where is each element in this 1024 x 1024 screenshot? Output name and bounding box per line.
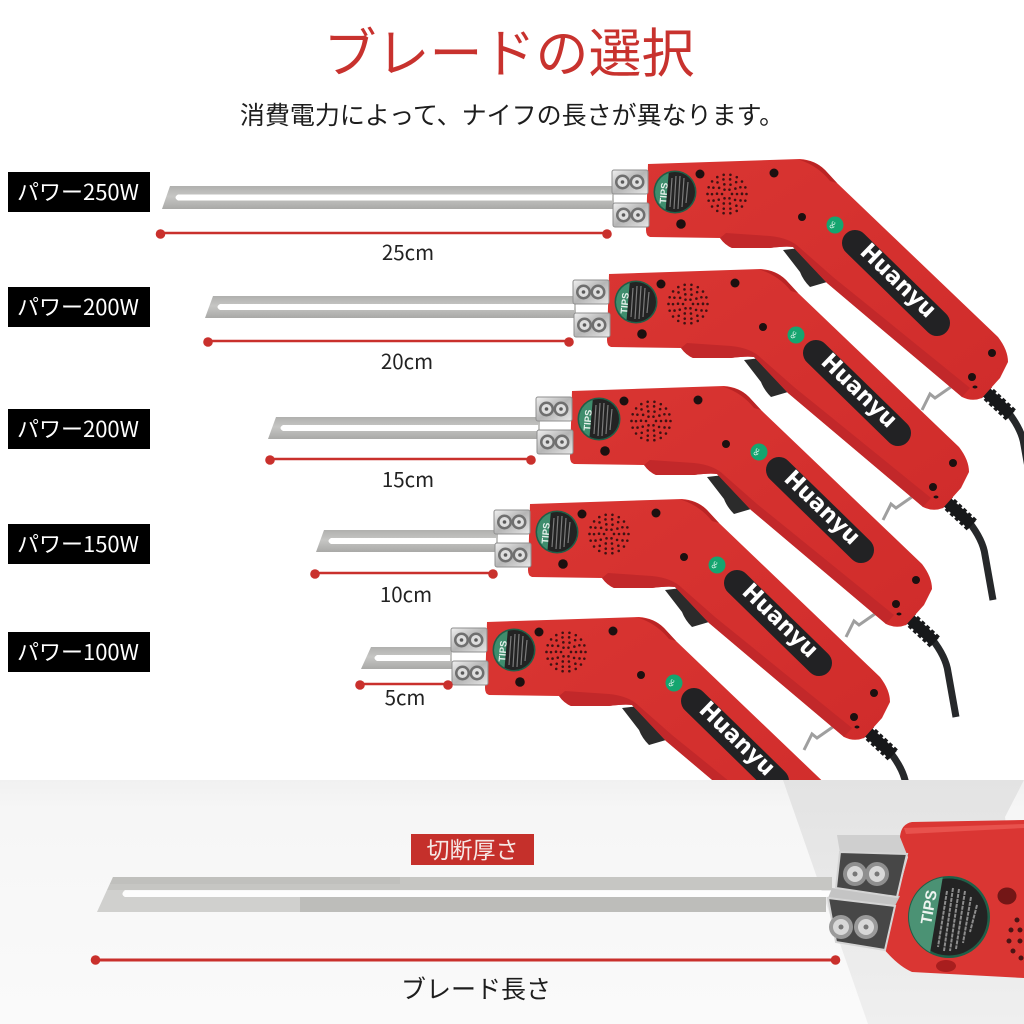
tool group: 10cm [316, 499, 914, 830]
length line 25cm [156, 229, 612, 239]
knife 15cm: TIPS [582, 409, 595, 431]
large blade [97, 877, 832, 912]
length label 20cm: 20cm [381, 345, 433, 375]
length line 15cm [265, 455, 536, 465]
knife 15cm [536, 386, 956, 717]
knife 20cm: Huanyu [816, 349, 902, 433]
subtitle: 消費電力によって、ナイフの長さが異なります。 [240, 96, 784, 132]
length line [91, 955, 840, 965]
power label 250W: パワー250W [17, 175, 139, 207]
tips sticker: TIPS [918, 889, 941, 926]
knife 25cm [612, 159, 1024, 490]
blade 20cm [205, 296, 576, 318]
knife 20cm: QC [790, 330, 799, 340]
length label 25cm: 25cm [382, 236, 434, 266]
tips sticker [908, 876, 990, 958]
panel background [0, 780, 1024, 1024]
knife 25cm: QC [829, 220, 838, 230]
knife 15cm: QC [753, 447, 762, 457]
length line 5cm [355, 680, 453, 690]
blade 5cm [361, 647, 452, 669]
tool group: 5cm [361, 617, 822, 780]
length label 5cm: 5cm [385, 681, 425, 711]
lower clamp [828, 898, 895, 950]
thickness tag: 切断厚さ [426, 831, 518, 865]
knife 5cm: Huanyu [694, 697, 780, 781]
blade 10cm [316, 530, 498, 552]
screw holes [936, 888, 1016, 972]
panel: blade detail [0, 780, 1024, 1024]
length caption: ブレード長さ [401, 970, 551, 1006]
power label 100W [8, 632, 150, 672]
speaker dots [1009, 920, 1021, 958]
upper clamp [836, 852, 907, 897]
knife 20cm [573, 269, 993, 600]
power label 150W: パワー150W [17, 527, 139, 559]
power label 150W [8, 524, 150, 564]
power label 100W: パワー100W [17, 635, 139, 667]
knife 10cm: QC [711, 560, 720, 570]
knife 5cm: QC [668, 678, 677, 688]
blade 15cm [268, 417, 540, 439]
power label 200W second: パワー200W [17, 412, 139, 444]
knife 5cm: TIPS [497, 640, 510, 662]
background band [783, 780, 1024, 1024]
tool group: 20cm [205, 269, 993, 600]
knife 25cm: Huanyu [855, 239, 941, 323]
blade root [828, 888, 900, 906]
power label 200W: パワー200W [17, 290, 139, 322]
clamp shadow [837, 835, 908, 853]
knife 25cm: TIPS [658, 182, 671, 204]
knife 20cm: TIPS [619, 292, 632, 314]
power label 200W [8, 287, 150, 327]
length label 15cm: 15cm [382, 463, 434, 493]
knife 5cm [450, 617, 822, 780]
length line 10cm [310, 569, 498, 579]
length line 20cm [203, 337, 574, 347]
knife 10cm [494, 499, 909, 780]
power label 200W second [8, 409, 150, 449]
knife 15cm: Huanyu [779, 466, 865, 550]
tool group: 15cm [268, 386, 956, 717]
blade 25cm [162, 186, 614, 209]
length label 10cm: 10cm [380, 578, 432, 608]
tool group: 25cm [162, 159, 1024, 490]
knife 10cm: TIPS [540, 522, 553, 544]
title: ブレードの選択 [324, 12, 694, 88]
knife 10cm: Huanyu [737, 579, 823, 663]
knife close-up [828, 820, 1024, 978]
power label 250W [8, 172, 150, 212]
